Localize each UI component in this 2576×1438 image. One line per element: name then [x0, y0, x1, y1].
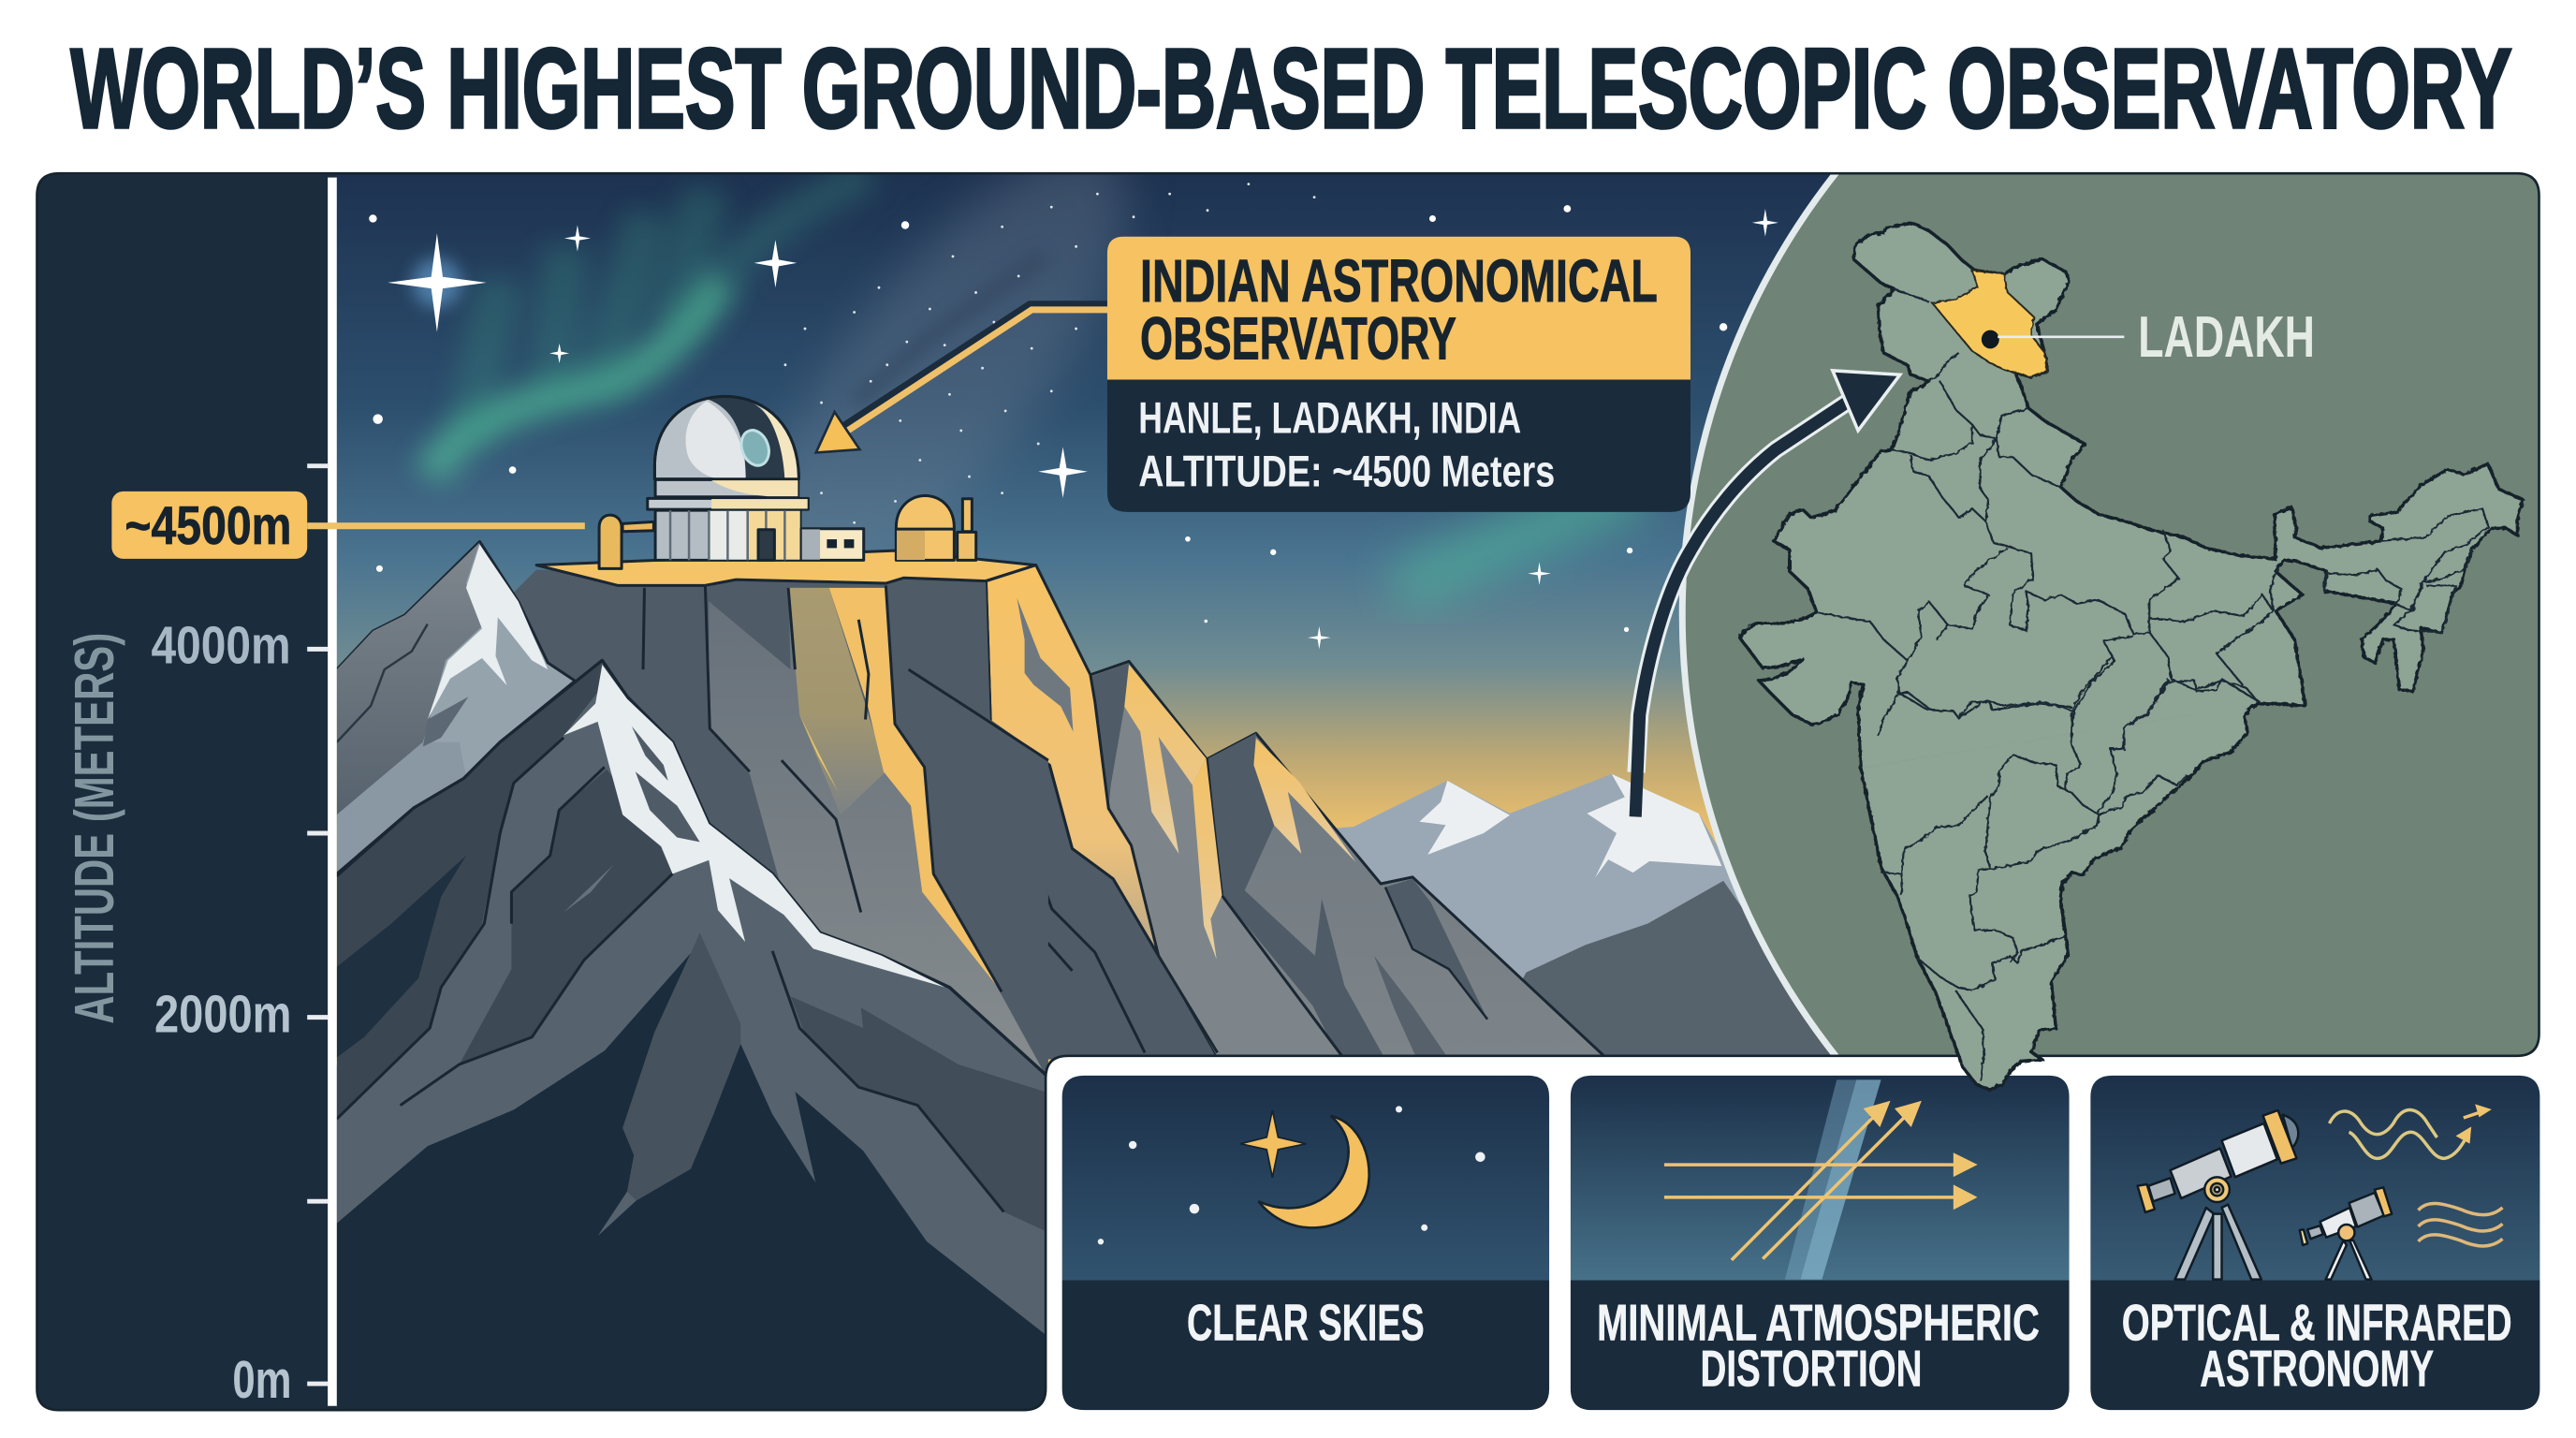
- Ladakh marker: [1982, 330, 1999, 348]
- tick label 4000m: 4000m: [151, 615, 291, 674]
- left back mountain: [337, 541, 575, 876]
- card: clear skies: CLEAR SKIES: [1187, 1295, 1425, 1352]
- slate column: [987, 582, 1219, 1060]
- third ridge: [1208, 733, 1608, 1060]
- altitude marker: ~4500m: [124, 496, 292, 556]
- icon: waves: [2330, 1110, 2502, 1246]
- card: clear skies: [1062, 1076, 1549, 1410]
- telescope icons: [2138, 1104, 2502, 1280]
- front mountain: [334, 660, 1048, 1432]
- stars: [369, 205, 1778, 649]
- tick label 0m: 0m: [232, 1350, 292, 1409]
- map panel circle: [1679, 174, 2539, 1054]
- axis title: ALTITUDE (METERS): [63, 633, 125, 1024]
- observatory: [599, 396, 976, 568]
- arrow to map: [1635, 371, 1900, 816]
- plateau: [536, 550, 1035, 585]
- snow streak: [564, 665, 944, 988]
- India map: [1739, 223, 2523, 1090]
- card: optical and infrared astronomy: [2090, 1076, 2539, 1410]
- mountains group: [334, 541, 1608, 1432]
- main dome: [654, 396, 798, 479]
- card: minimal atmospheric distortion: MINIMAL ATMOSPHERIC: [1597, 1295, 2040, 1352]
- annex: [801, 529, 864, 560]
- northern India: [1739, 223, 2523, 768]
- altitude marker: [111, 492, 585, 559]
- icon: light rays through atmosphere: [1664, 1079, 1974, 1280]
- cliff: [514, 569, 1049, 1072]
- icon: star and moon: [1098, 1106, 1486, 1244]
- gold buttress: [986, 565, 1159, 956]
- night sky: [335, 97, 1863, 1065]
- southern India: [1861, 704, 2260, 1090]
- state borders north: [1816, 289, 2488, 768]
- right ridge mountains and cliff right side: [986, 564, 1604, 1060]
- far mountains: [1314, 774, 1848, 1060]
- small dome: [896, 495, 954, 560]
- central mountain: [334, 541, 1048, 1432]
- callout: ALTITUDE: ~4500 Meters: [1138, 448, 1555, 497]
- callout: [1107, 237, 1690, 512]
- tick label 2000m: 2000m: [154, 984, 292, 1043]
- icon: small telescope: [2300, 1187, 2392, 1280]
- second ridge: [1090, 661, 1344, 1060]
- Ladakh highlight: [1932, 271, 2047, 377]
- callout: HANLE, LADAKH, INDIA: [1138, 394, 1521, 444]
- card: minimal atmospheric distortion: [1571, 1076, 2070, 1410]
- callout: INDIAN ASTRONOMICAL: [1140, 247, 1658, 315]
- callout: OBSERVATORY: [1140, 305, 1456, 373]
- card: optical and infrared astronomy: ASTRONOMY: [2200, 1341, 2434, 1398]
- state borders south: [1881, 655, 2260, 1081]
- card: minimal atmospheric distortion: DISTORTION: [1701, 1341, 1922, 1398]
- Ladakh label: LADAKH: [2138, 305, 2315, 370]
- callout leader arrow: [816, 306, 1110, 452]
- axis: [63, 178, 337, 1409]
- mast: [599, 515, 622, 568]
- icon: large telescope: [2138, 1110, 2298, 1280]
